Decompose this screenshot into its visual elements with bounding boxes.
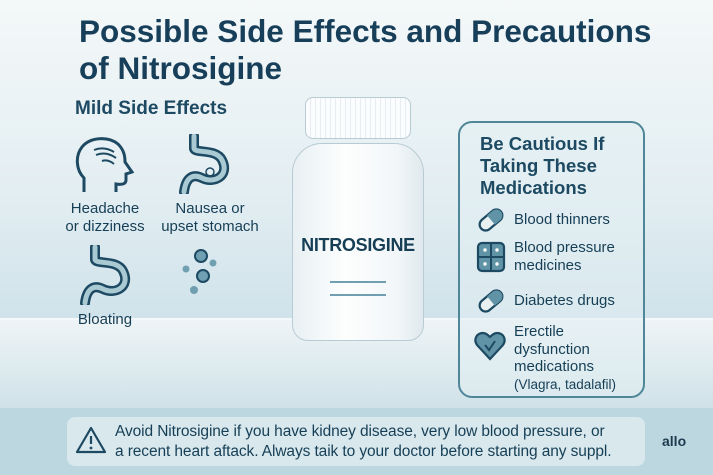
item: blood thinners [478,208,610,232]
item: blood pressure [476,239,615,274]
logo: allo [662,433,686,449]
panel heading: Medications [480,177,587,198]
bottle body [292,143,424,341]
item: ED medications: (Vlagra, tadalafil) [514,376,616,392]
icon: stomach nausea [179,134,230,194]
item: ED medications: dysfunction [514,340,590,358]
title [79,13,651,86]
text: headache: or dizziness [65,218,145,235]
panel heading: Be Cautious If [480,133,604,154]
title: of Nitrosigine [79,50,282,86]
heading: mild side effects: Mild Side Effects [75,98,227,119]
text: nausea: upset stomach [161,218,259,235]
bottle [292,97,424,341]
item: ED medications: medications [514,358,594,375]
shelf [0,318,713,410]
item: blood thinners: Blood thinners [514,211,610,228]
text: bloating: Bloating [78,311,132,328]
icon: stomach bloating [80,245,130,305]
item: diabetes [478,289,615,313]
title: Possible Side Effects and Precautions [79,13,651,49]
callout: warning banner [67,417,645,466]
item: blood pressure: Blood pressure [514,239,615,256]
panel heading: Taking These [480,155,597,176]
bottle label: NITROSIGINE [301,235,415,255]
icon: warning triangle [76,426,106,454]
bottom strip [0,408,713,475]
panel heading [480,133,604,198]
warning text [115,423,611,460]
item: diabetes: Diabetes drugs [514,292,615,309]
panel: cautious medications [458,121,645,398]
warning text: Avoid Nitrosigine if you have kidney disease, very low blood pressure, or [115,423,605,440]
text: headache: Headache [71,200,139,217]
warning text: a recent heart aftack. Always taik to your doctor before starting any suppl. [115,443,611,460]
item: ED medications: Erectile [514,323,564,340]
bottle cap [305,97,411,139]
icon: head [76,137,134,192]
icon: bubbles [182,249,216,294]
item: ED medications [474,323,616,392]
item: blood pressure: medicines [514,257,582,274]
text: nausea [161,200,259,235]
text: headache [65,200,145,235]
text: nausea: Nausea or [175,200,245,217]
